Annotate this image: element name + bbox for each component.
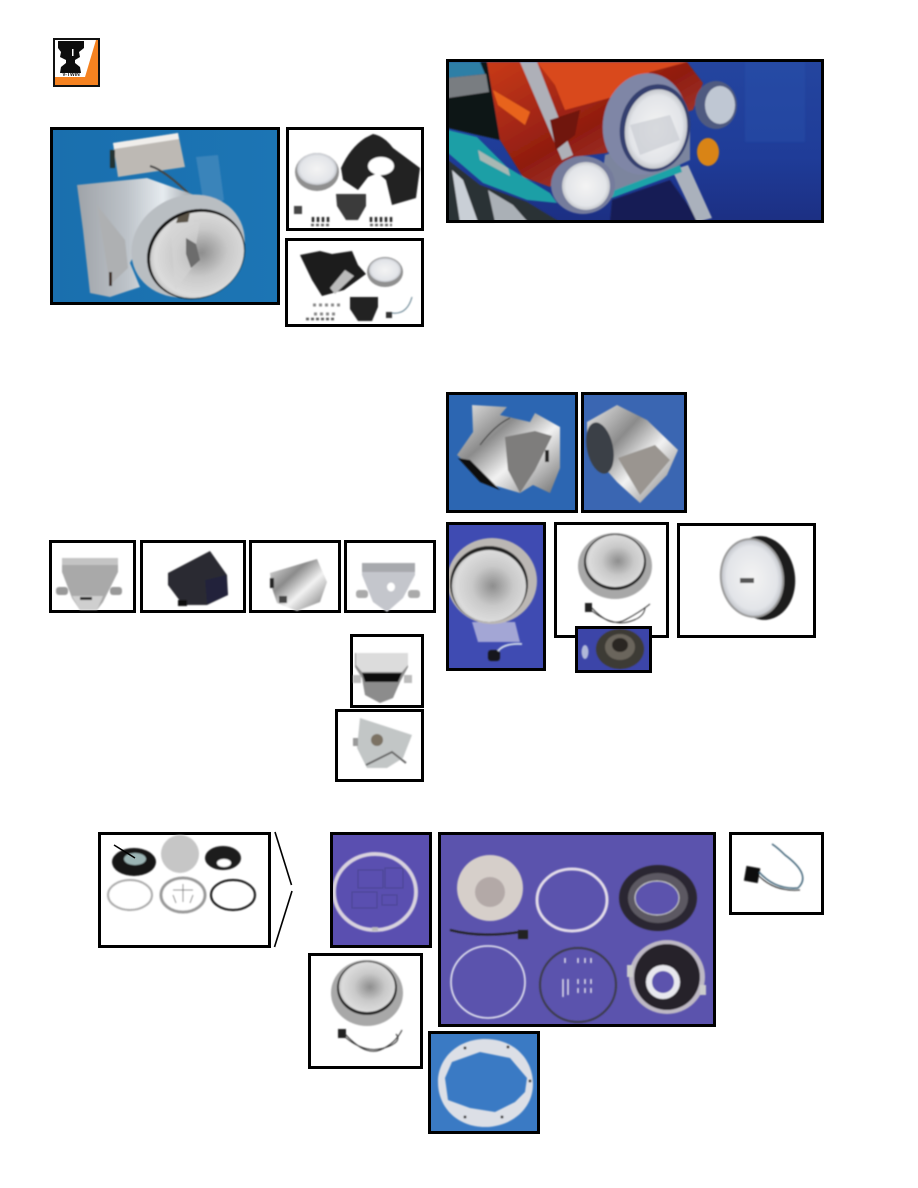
photo inset: headlamp boot and bulb on purple xyxy=(576,628,650,672)
photo: chrome lower cover, angled xyxy=(250,542,340,612)
photo: headlamp with pigtail wires xyxy=(310,954,422,1068)
photo: black nacelle kit parts xyxy=(288,128,422,230)
photo: chrome mounting ring on blue xyxy=(430,1032,538,1132)
photo: chrome headlight nacelle with visor box on blue xyxy=(52,128,278,316)
photo: black nacelle kit, second view xyxy=(286,240,422,326)
photo: black lower cover xyxy=(142,542,244,612)
logo: V-Twin badge: V-TWIN xyxy=(62,72,80,78)
photo: chrome nacelle front view xyxy=(448,394,576,512)
arrow: pointer to boot xyxy=(114,845,135,858)
arrow: chevron bracket linking kit to trim rings xyxy=(274,832,292,947)
photo: chrome and black cover xyxy=(352,636,422,706)
photo: chrome cover with stud xyxy=(336,710,422,780)
logo: V-Twin badge xyxy=(53,38,100,87)
photo: exploded headlamp bucket kit on purple xyxy=(440,834,714,1026)
photo: chrome trim ring on purple xyxy=(332,834,430,946)
photo: spot lamp on purple with bracket and plug xyxy=(447,524,544,670)
photo: motorcycle with red windshield and passing lamps xyxy=(448,60,822,222)
photo: chrome lower cover xyxy=(50,542,134,612)
photo: wiring pigtail plug on white xyxy=(730,834,822,914)
photo: chrome headlamp with wiring on white xyxy=(556,524,668,636)
photo: retrofit kit parts with pointer xyxy=(100,834,270,946)
photo: chrome lower cover with hole xyxy=(346,542,434,612)
photo: chrome nacelle side view xyxy=(582,394,686,512)
photo: sealed beam unit with black back xyxy=(678,524,814,636)
